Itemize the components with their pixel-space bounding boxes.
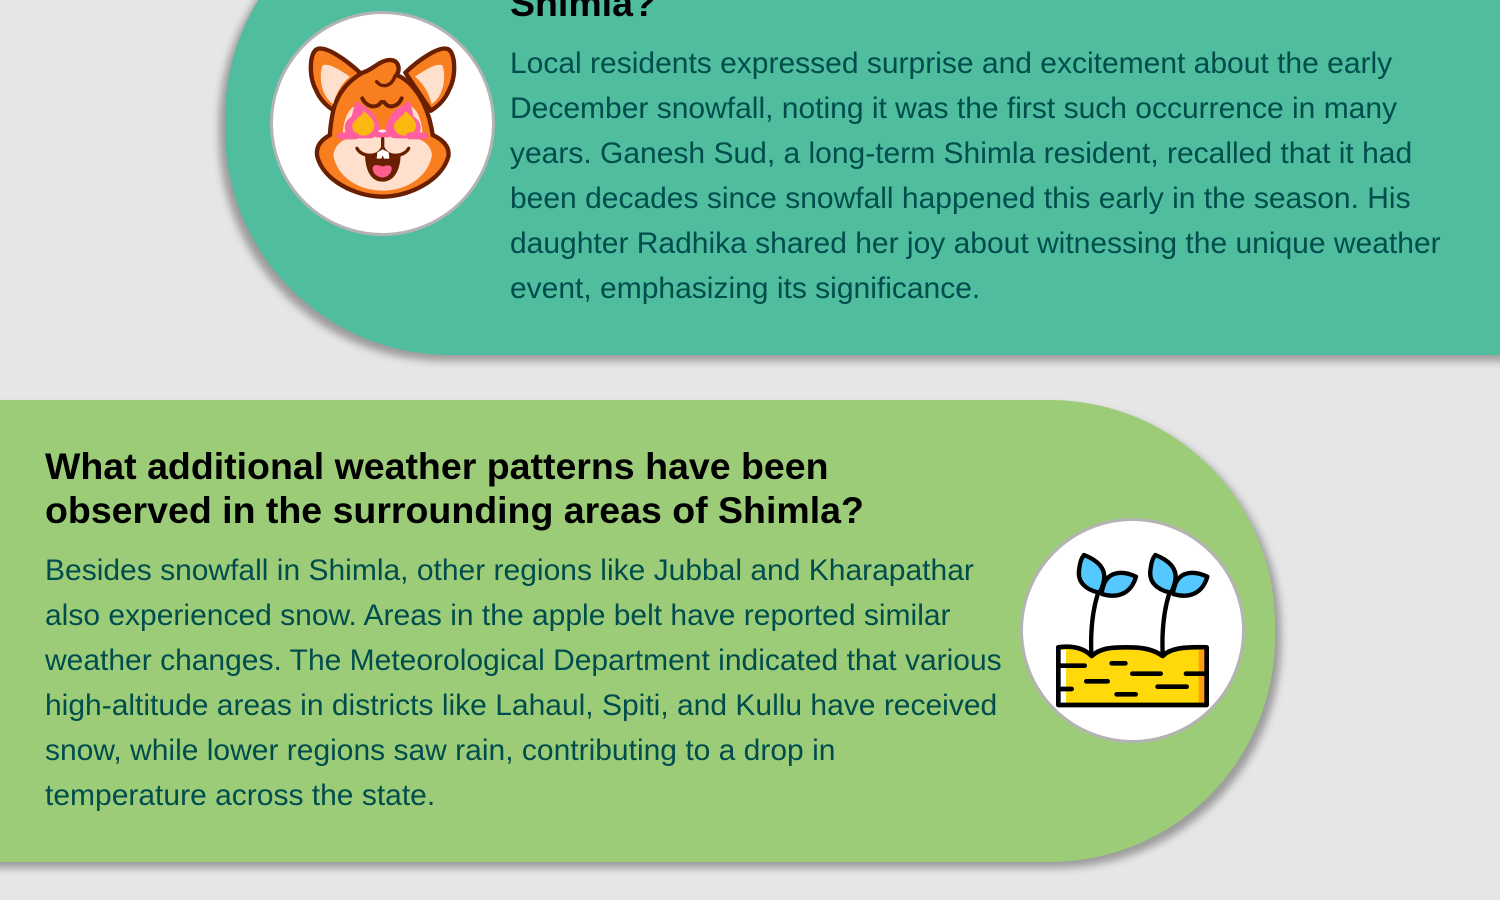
icon: squirrel with flame eyes <box>270 11 495 236</box>
text block: surrounding areas <box>45 554 1002 812</box>
text block: residents' reaction: December snowfall, noting it was the first such occurrence in many <box>510 92 1397 125</box>
heading: surrounding areas <box>45 445 864 531</box>
text block: surrounding areas: snow, while lower regions saw rain, contributing to a drop in <box>45 734 835 767</box>
text block: residents' reaction: daughter Radhika shared her joy about witnessing the unique weather <box>510 227 1441 260</box>
text block: surrounding areas: also experienced snow. Areas in the apple belt have reported similar <box>45 599 951 632</box>
text block: residents' reaction: Local residents expressed surprise and excitement about the early <box>510 47 1392 80</box>
text block: residents' reaction <box>510 47 1441 305</box>
icon: seedlings in soil <box>1020 518 1245 743</box>
text block: residents' reaction: years. Ganesh Sud, a long-term Shimla resident, recalled that it had <box>510 137 1412 170</box>
text block: residents' reaction: been decades since snowfall happened this early in the season. His <box>510 182 1411 215</box>
panel: surrounding areas <box>0 400 1275 862</box>
text block: surrounding areas: weather changes. The Meteorological Department indicated that various <box>45 644 1002 677</box>
text block: residents' reaction: event, emphasizing its significance. <box>510 272 980 305</box>
text block: surrounding areas: high-altitude areas in districts like Lahaul, Spiti, and Kullu have received <box>45 689 997 722</box>
text block: surrounding areas: Besides snowfall in Shimla, other regions like Jubbal and Kharapathar <box>45 554 974 587</box>
heading: surrounding areas: What additional weather patterns have been <box>45 445 828 487</box>
heading: surrounding areas: observed in the surrounding areas of Shimla? <box>45 489 864 531</box>
text block: surrounding areas: temperature across the state. <box>45 779 435 812</box>
panel: residents' reaction <box>225 0 1500 355</box>
